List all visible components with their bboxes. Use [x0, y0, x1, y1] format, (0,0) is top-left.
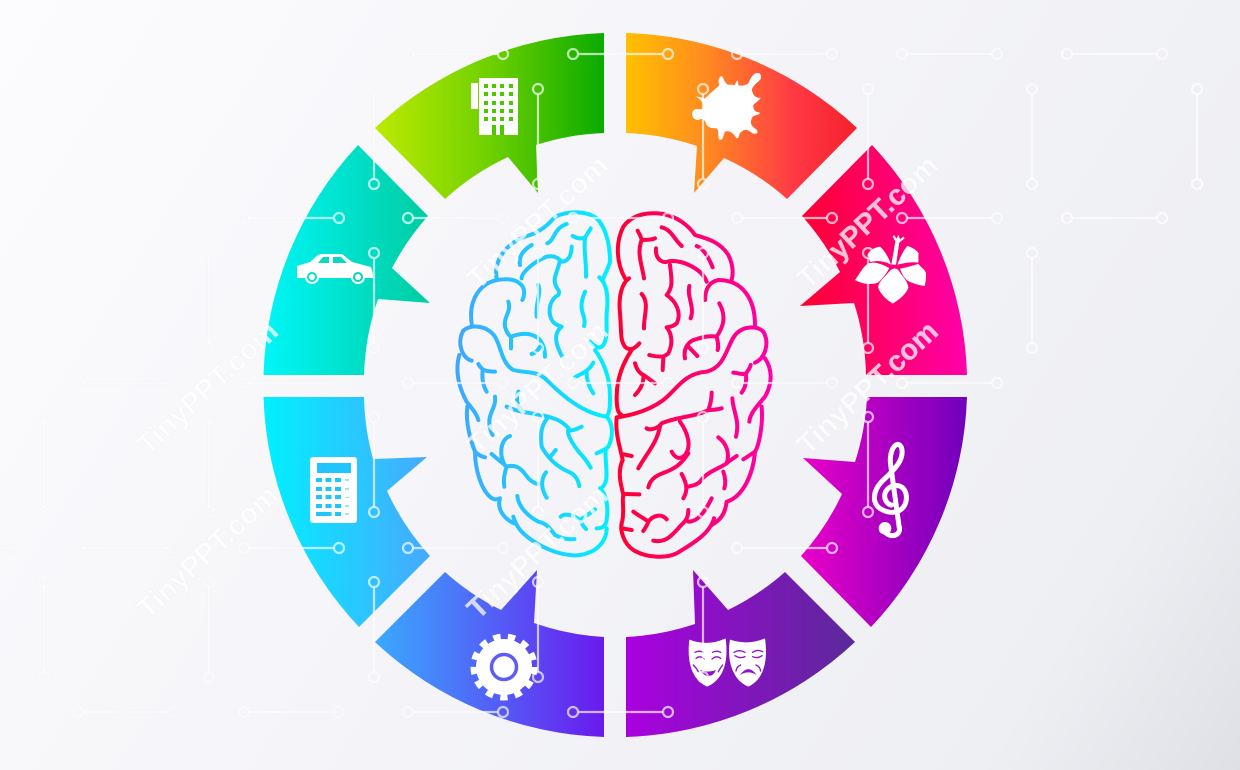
watermarks: TinyPPT.com	[461, 149, 615, 295]
left hemisphere	[457, 212, 612, 555]
segment: top left green	[375, 33, 604, 199]
segment: right upper pink	[800, 145, 967, 375]
icon: calculator	[310, 457, 357, 523]
segment: top right orange	[626, 33, 857, 199]
segment: left lower blue	[264, 397, 430, 627]
icon: hibiscus flower	[855, 235, 926, 304]
watermarks: TinyPPT.com	[791, 149, 945, 295]
watermarks: TinyPPT.com	[461, 479, 615, 625]
watermarks: TinyPPT.com	[131, 479, 285, 625]
segment: right lower purple	[801, 397, 967, 627]
segment: bottom left indigo	[375, 570, 604, 737]
watermarks	[131, 149, 945, 625]
watermarks: TinyPPT.com	[131, 315, 285, 461]
segment: bottom right violet	[626, 570, 855, 737]
icon: paint splat	[692, 73, 761, 140]
watermarks: TinyPPT.com	[791, 315, 945, 461]
segment: left upper teal	[264, 145, 430, 375]
icon: office building	[471, 78, 518, 135]
icon: car	[297, 254, 373, 284]
icon: gear	[474, 637, 534, 697]
brain	[457, 212, 771, 557]
icon: treble clef	[874, 444, 906, 536]
watermarks: TinyPPT.com	[461, 315, 615, 461]
right hemisphere	[616, 213, 771, 557]
icon: theatre masks	[689, 638, 766, 687]
